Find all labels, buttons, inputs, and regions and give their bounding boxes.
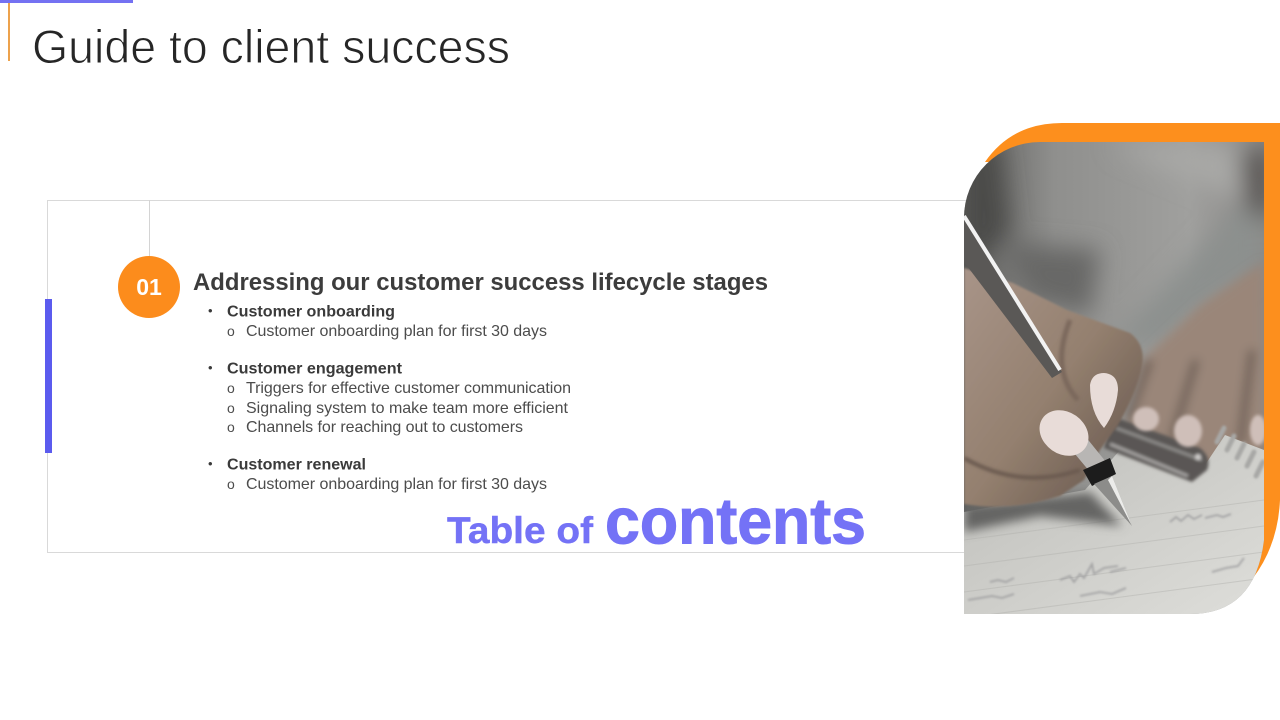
list: lifecycle stages: o [227,380,235,396]
list: lifecycle stages: Signaling system to make team more efficient [246,400,569,417]
list: lifecycle stages: o [227,419,235,435]
panel: contents frame [48,200,978,552]
left hand [964,268,1143,507]
list: lifecycle stages: • [208,303,213,318]
list: lifecycle stages [208,303,571,493]
list: lifecycle stages: Triggers for effective customer communication [246,380,571,397]
paper [964,435,1264,614]
table of contents label [447,484,866,558]
spiral binding [1217,428,1263,476]
list: lifecycle stages: o [227,323,235,339]
list: lifecycle stages: o [227,400,235,416]
right-hand nails [1133,407,1266,447]
frame accent bar [45,299,52,453]
table of contents label: contents [605,484,866,558]
table of contents label: Table of [447,510,594,551]
title: Guide to client success [32,20,510,73]
title accent line [8,3,10,61]
orange photo backing shape [985,123,1280,578]
paper lines [964,500,1264,618]
list: lifecycle stages: • [208,360,213,375]
fountain pen [964,214,1132,526]
shadow under hand [964,492,1122,532]
list: lifecycle stages: Channels for reaching out to customers [246,419,523,436]
top accent bar [0,0,133,3]
pen cap [1104,416,1208,482]
list: lifecycle stages: Customer onboarding [227,304,395,320]
left-hand fingernails [1040,373,1118,456]
list: lifecycle stages: Customer renewal [227,456,366,474]
list: lifecycle stages: • [208,456,213,471]
dark background patches [960,140,1270,345]
list: lifecycle stages: Customer onboarding plan for first 30 days [246,476,547,493]
list: lifecycle stages: Customer engagement [227,360,403,378]
photo: hand writing with fountain pen [960,140,1270,618]
list: lifecycle stages: o [227,476,235,492]
connector line [148,200,150,257]
right hand [1122,267,1264,461]
section heading: Addressing our customer success lifecycle stages [193,269,768,296]
number badge 01 [118,256,180,318]
number badge 01: 01 [136,274,162,300]
list: lifecycle stages: Customer onboarding plan for first 30 days [246,323,547,340]
handwriting [968,514,1244,600]
